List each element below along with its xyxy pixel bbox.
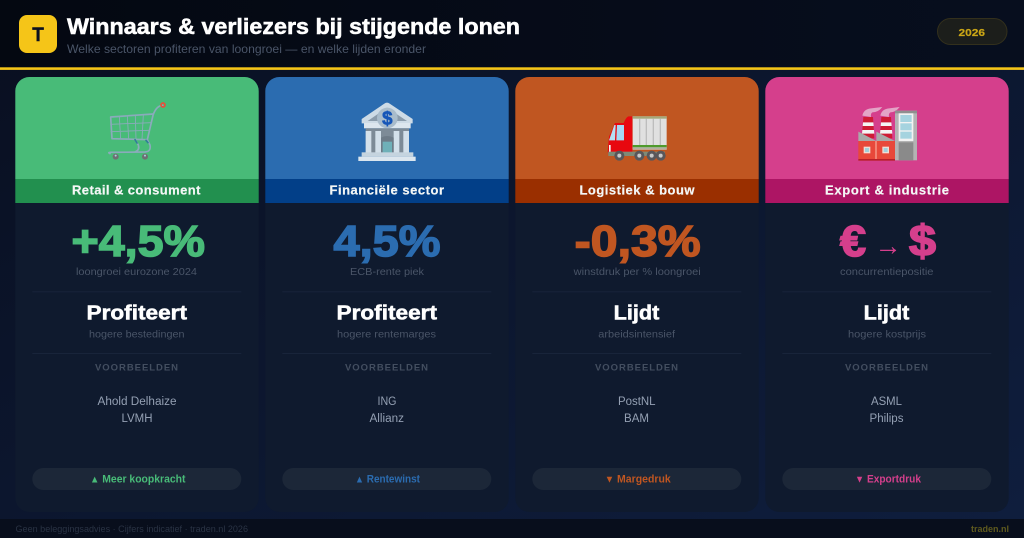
verdict reason: hogere rentemarges xyxy=(337,329,436,341)
examples list xyxy=(618,396,656,425)
sector band: Retail & consument xyxy=(72,182,201,198)
title: Winnaars & verliezers bij stijgende lonen xyxy=(67,14,520,39)
icon: factory xyxy=(858,107,917,161)
verdict reason: arbeidsintensief xyxy=(598,329,675,341)
key figure: +4,5% xyxy=(72,217,205,266)
verdict reason: hogere kostprijs xyxy=(848,329,926,341)
logo badge xyxy=(19,15,57,53)
verdict: Lijdt xyxy=(614,301,659,324)
figure caption: concurrentiepositie xyxy=(840,266,934,278)
panel: export & industrie xyxy=(765,77,1009,512)
sector band xyxy=(765,179,1009,203)
examples heading: VOORBEELDEN xyxy=(595,362,678,374)
logo badge: T xyxy=(32,25,44,46)
figure caption: loongroei eurozone 2024 xyxy=(76,266,197,278)
icon: bank building xyxy=(358,103,416,161)
icon: bank building: $ xyxy=(382,108,393,129)
examples heading: VOORBEELDEN xyxy=(95,362,178,374)
brand: traden.nl xyxy=(971,524,1009,535)
examples list: ING xyxy=(378,396,397,408)
key figure: euro to dollar: $ xyxy=(909,217,936,266)
panel: logistiek & bouw xyxy=(515,77,759,512)
year badge: 2026 xyxy=(958,27,985,39)
examples list xyxy=(98,396,176,425)
verdict: Profiteert xyxy=(336,301,437,324)
examples heading: VOORBEELDEN xyxy=(845,362,928,374)
sector band xyxy=(265,179,509,203)
footer xyxy=(0,519,1024,538)
pill: rentewinst xyxy=(282,468,491,490)
key figure: -0,3% xyxy=(575,217,701,266)
examples list: BAM xyxy=(624,413,649,425)
examples list: Philips xyxy=(870,413,904,425)
figure caption: ECB-rente piek xyxy=(350,266,425,278)
verdict: Profiteert xyxy=(86,301,187,324)
subtitle: Welke sectoren profiteren van loongroei — en welke lijden eronder xyxy=(67,42,426,56)
panel: financiele sector xyxy=(265,77,509,512)
examples list: Allianz xyxy=(370,413,404,425)
sector band: Export & industrie xyxy=(825,182,949,198)
key figure: euro to dollar: → xyxy=(874,230,902,261)
pill: rentewinst: ▲ Rentewinst xyxy=(355,474,420,486)
examples list xyxy=(870,396,904,425)
sector band: Logistiek & bouw xyxy=(580,182,695,198)
disclaimer: Geen beleggingsadvies · Cijfers indicatief · traden.nl 2026 xyxy=(16,524,248,535)
year badge xyxy=(938,18,1007,44)
pill: margedruk: ▼ Margedruk xyxy=(605,474,672,486)
header xyxy=(0,0,1024,70)
panel: retail & consument xyxy=(15,77,259,512)
sector band xyxy=(15,179,259,203)
icon: truck xyxy=(608,116,667,161)
examples list: Ahold Delhaize xyxy=(98,396,176,408)
examples list: LVMH xyxy=(122,413,152,425)
verdict reason: hogere bestedingen xyxy=(89,329,185,341)
examples list: ASML xyxy=(871,396,903,408)
key figure: euro to dollar xyxy=(840,217,936,266)
examples heading: VOORBEELDEN xyxy=(345,362,428,374)
icon: shopping cart xyxy=(109,103,165,160)
pill: meer koopkracht: ▲ Meer koopkracht xyxy=(90,474,186,486)
pill: exportdruk xyxy=(782,468,991,490)
key figure: euro to dollar: € xyxy=(840,217,866,266)
examples list xyxy=(370,396,404,425)
key figure: 4,5% xyxy=(334,217,440,266)
pill: exportdruk: ▼ Exportdruk xyxy=(855,474,922,486)
sector band: Financiële sector xyxy=(330,182,444,198)
examples list: PostNL xyxy=(618,396,656,408)
pill: meer koopkracht xyxy=(32,468,241,490)
figure caption: winstdruk per % loongroei xyxy=(573,266,701,278)
sector band xyxy=(515,179,759,203)
pill: margedruk xyxy=(532,468,741,490)
verdict: Lijdt xyxy=(864,301,909,324)
